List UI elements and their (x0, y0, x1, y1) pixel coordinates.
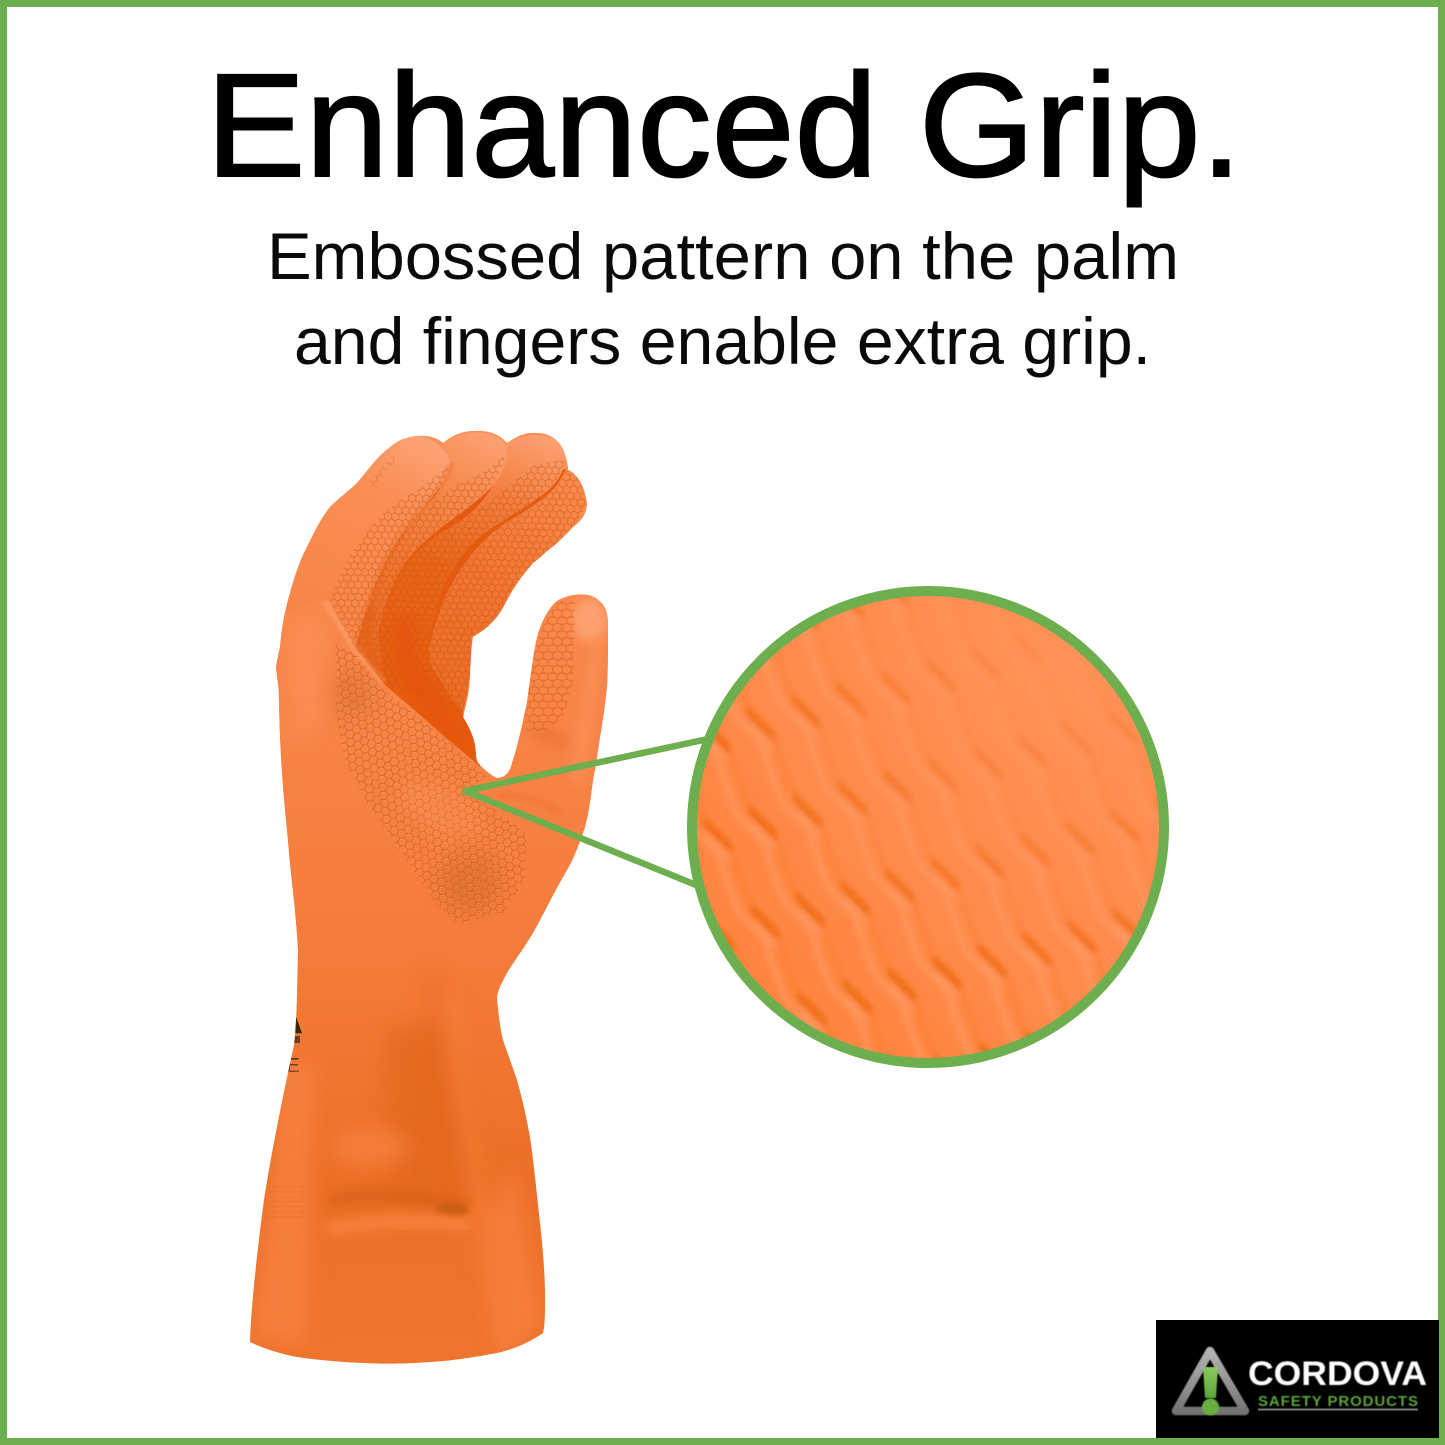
callout pointer lines (465, 739, 708, 885)
orange rubber glove (250, 430, 608, 1364)
subtitle: and fingers enable extra grip. (294, 304, 1151, 378)
cuff label print: CE (272, 1055, 300, 1077)
logo triangle icon (1176, 1351, 1245, 1416)
finger four (427, 467, 586, 713)
cuff horizontal fold (327, 1195, 470, 1207)
finger two (356, 432, 507, 683)
magnified grip texture circle (680, 580, 1180, 1080)
dark pattern patch lower palm (440, 855, 500, 912)
crease highlight (325, 602, 383, 683)
wavy embossed pattern (697, 597, 1158, 1058)
logo wordmark: CORDOVA (1248, 1355, 1427, 1393)
subtitle: Embossed pattern on the palm (267, 219, 1179, 293)
back of hand side light (294, 639, 320, 732)
cuff light blob (330, 1127, 410, 1167)
thumb side light (570, 659, 598, 782)
cuff right light side (492, 1182, 538, 1338)
cuff dark fold column (385, 1024, 451, 1186)
finger one soft shadow edge (355, 463, 451, 650)
cavity shade behind fingers (355, 447, 583, 767)
subtitle (267, 219, 1179, 378)
thumb web fold (497, 796, 560, 813)
thumb grip pattern (523, 600, 575, 732)
texture base (690, 589, 1166, 1065)
finger one grip strip (330, 463, 451, 650)
light palm centre (402, 782, 478, 839)
logo exclamation mark (1202, 1367, 1219, 1416)
finger three (380, 435, 566, 767)
cuff left light side (253, 1063, 317, 1347)
circle ring (692, 591, 1164, 1063)
cuff ribbing (264, 1187, 473, 1238)
top right fade (794, 597, 1158, 940)
cuff central light ridge (452, 1056, 502, 1352)
title: Enhanced Grip. (206, 44, 1242, 208)
Cordova logo (1156, 1320, 1439, 1438)
dark pattern patch upper palm (332, 671, 370, 716)
finger one knuckle pattern (368, 456, 395, 486)
palm and thumb foreground (276, 594, 608, 960)
logo tagline: SAFETY PRODUCTS (1258, 1393, 1418, 1410)
cuff light band (327, 1222, 470, 1230)
palm grip pattern (335, 643, 527, 923)
cuff dark spot (435, 1204, 468, 1216)
thumb tip highlight (572, 598, 608, 642)
finger one and back of hand (283, 436, 453, 648)
cuff crease line (430, 970, 470, 1197)
thumb shade (531, 727, 566, 746)
cuff label print (288, 1016, 302, 1072)
cuff label print: A (270, 991, 303, 1043)
